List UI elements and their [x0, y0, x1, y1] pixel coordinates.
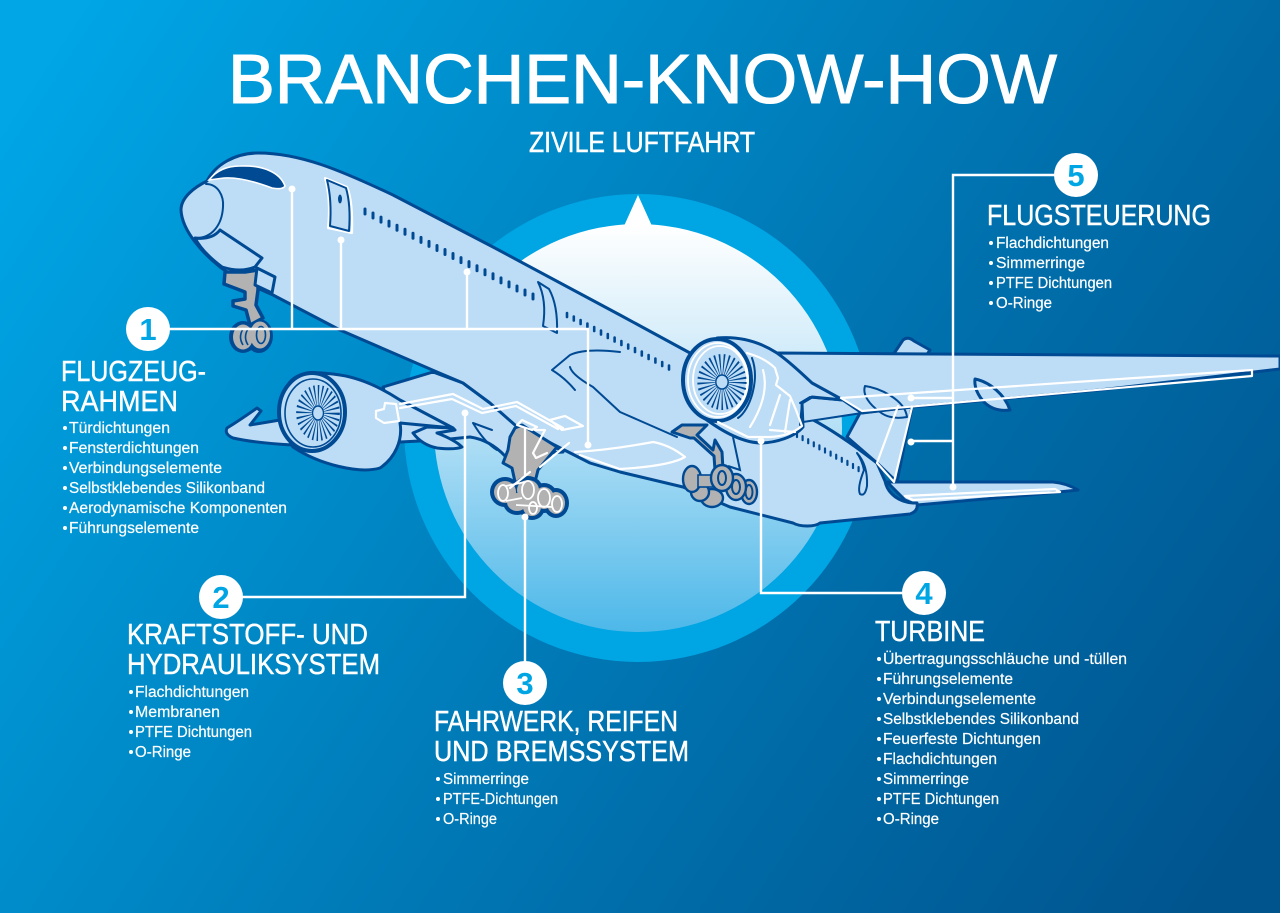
list 4: Simmerringe [883, 771, 969, 788]
heading 1: FLUGZEUG- [61, 356, 206, 388]
tail white outlines [841, 370, 1252, 500]
list 5: Simmerringe [996, 255, 1085, 272]
heading 3: UND BREMSSYSTEM [434, 736, 689, 768]
number badge 3: 3 [516, 666, 534, 701]
section 4: turbine [875, 571, 1127, 828]
center landing gear [490, 425, 569, 520]
list 2: Membranen [135, 704, 220, 721]
fuel and hydraulic pipes [376, 394, 583, 430]
number badge 2 [199, 575, 243, 619]
tail cabin windows [797, 433, 859, 471]
list 1: Fensterdichtungen [69, 440, 199, 457]
cabin door 2 [538, 282, 557, 333]
near-side horizontal tail fin [847, 407, 912, 482]
horizontal stabilizer [887, 482, 1078, 505]
list 4: Selbstklebendes Silikonband [883, 711, 1079, 728]
aircraft illustration [181, 153, 1280, 526]
cockpit window [209, 166, 285, 189]
list 3: Simmerringe [443, 771, 529, 788]
list 4: O-Ringe [883, 811, 939, 828]
list 2: Flachdichtungen [135, 684, 249, 701]
section 1: airframe [61, 307, 287, 537]
list 4: Verbindungselemente [883, 691, 1036, 708]
turbine highlight [718, 353, 802, 437]
number badge 2: 2 [212, 580, 230, 615]
heading 5: FLUGSTEUERUNG [987, 200, 1211, 232]
number badge 1 [126, 307, 170, 351]
heading 2 [127, 619, 380, 681]
subtitle: ZIVILE LUFTFAHRT [529, 127, 755, 159]
wing main [777, 353, 1280, 413]
cabin door 1 [325, 178, 352, 233]
list 1: Verbindungselemente [69, 460, 222, 477]
list 2 [129, 684, 252, 761]
list 5: O-Ringe [996, 295, 1052, 312]
cabin door 3 [857, 453, 867, 495]
list 1: Türdichtungen [69, 420, 170, 437]
list 1: Aerodynamische Komponenten [69, 500, 287, 517]
gear fairing [195, 230, 262, 270]
nose cone [196, 184, 223, 238]
list 4: Feuerfeste Dichtungen [883, 731, 1041, 748]
list 3 [436, 771, 558, 828]
right engine [683, 338, 862, 443]
list 4: Führungselemente [883, 671, 1013, 688]
wing underside between engine and fin [800, 398, 862, 422]
wing flap fairings [864, 379, 1010, 418]
section 3: landing gear [434, 661, 689, 828]
list 5: Flachdichtungen [996, 235, 1109, 252]
cabin windows [365, 209, 533, 299]
list 1: Führungselemente [69, 520, 199, 537]
list 3: O-Ringe [443, 811, 497, 828]
heading 4: TURBINE [875, 616, 985, 648]
far winglet [893, 338, 930, 356]
heading 3: FAHRWERK, REIFEN [434, 706, 678, 738]
center gear white struts [498, 420, 569, 514]
section 5: flight controls [987, 153, 1211, 312]
white fairing outline [575, 442, 685, 469]
right landing gear [672, 425, 757, 507]
number badge 4: 4 [915, 576, 933, 611]
heading 2: HYDRAULIKSYSTEM [127, 649, 380, 681]
list 2: O-Ringe [135, 744, 191, 761]
number badge 5: 5 [1067, 158, 1085, 193]
list 5 [989, 235, 1112, 312]
nose gear door [255, 268, 275, 293]
number badge 3 [503, 661, 547, 705]
compass disc [404, 194, 872, 662]
heading 3 [434, 706, 689, 768]
list 2: PTFE Dichtungen [135, 724, 252, 741]
connector lines [148, 175, 1076, 683]
list 4: Übertragungsschläuche und -tüllen [883, 650, 1127, 668]
section 2: fuel and hydraulics [127, 575, 380, 761]
heading 1 [61, 356, 206, 418]
list 4: PTFE Dichtungen [883, 791, 999, 808]
list 5: PTFE Dichtungen [996, 275, 1112, 292]
number badge 1: 1 [139, 312, 157, 347]
rear cabin windows [567, 313, 669, 370]
fuselage [181, 153, 917, 526]
left engine [226, 373, 497, 470]
number badge 5 [1054, 153, 1098, 197]
title: BRANCHEN-KNOW-HOW [228, 40, 1057, 118]
list 3: PTFE-Dichtungen [443, 791, 558, 808]
list 4 [877, 650, 1127, 828]
list 4: Flachdichtungen [883, 751, 997, 768]
number badge 4 [902, 571, 946, 615]
list 1 [63, 420, 287, 537]
wing root lines [552, 351, 677, 437]
heading 1: RAHMEN [61, 386, 178, 418]
list 1: Selbstklebendes Silikonband [69, 480, 265, 497]
nose landing gear [224, 270, 273, 353]
heading 2: KRAFTSTOFF- UND [127, 619, 368, 651]
left wing root [383, 372, 563, 456]
